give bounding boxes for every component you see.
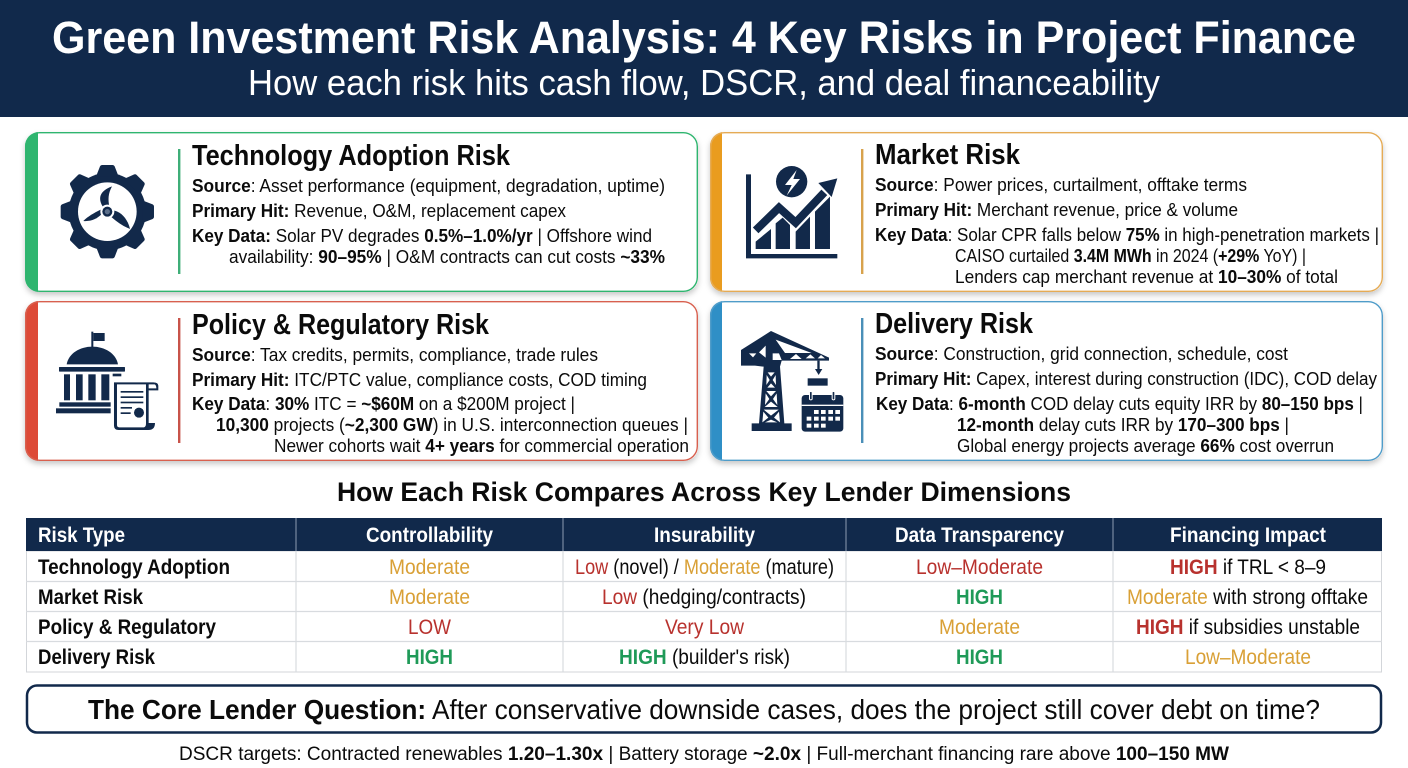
table row: market risk [38, 586, 1368, 609]
table row: technology adoption [38, 556, 1326, 579]
heading: Delivery Risk [875, 308, 1034, 340]
text: key data: 10,300 projects (~2,300 GW) in U.S. interconnection queues | [216, 414, 688, 435]
table row: policy and regulatory: HIGH if subsidies unstable [1136, 616, 1360, 639]
text: primary hit: Primary Hit: Revenue, O&M, replacement capex [192, 200, 567, 221]
footnote: DSCR targets: DSCR targets: Contracted renewables 1.20–1.30x | Battery storage ~2.0x | Full-merchant financing rare above 100–150 MW [179, 744, 1229, 765]
subtitle: How each risk hits cash flow, DSCR, and deal financeability [248, 62, 1160, 103]
table row: policy and regulatory: Policy & Regulatory [38, 616, 216, 639]
text: key data [192, 393, 689, 456]
text: key data: Key Data: Solar CPR falls below 75% in high-penetration markets | [875, 224, 1379, 245]
text: primary hit: Primary Hit: Merchant revenue, price & volume [875, 199, 1238, 220]
text: key data: Key Data: 6-month COD delay cuts equity IRR by 80–150 bps | [876, 393, 1363, 414]
panel: market risk [710, 132, 1383, 292]
table header row [38, 524, 1326, 547]
text: source: Source: Power prices, curtailment, offtake terms [875, 174, 1247, 195]
table row: market risk: HIGH [956, 586, 1003, 609]
table row: technology adoption: Moderate [389, 556, 470, 579]
table row: delivery risk: HIGH (builder's risk) [619, 646, 790, 669]
title: Green Investment Risk Analysis: 4 Key Risks in Project Finance [52, 12, 1356, 63]
table header row: Insurability [654, 524, 755, 547]
table header row: Risk Type [38, 524, 125, 547]
heading: Market Risk [875, 139, 1021, 171]
text: key data [875, 224, 1379, 287]
text: key data: Global energy projects average 66% cost overrun [957, 435, 1334, 456]
comparison table [26, 518, 1382, 672]
table row: policy and regulatory: LOW [408, 616, 451, 639]
text: key data: Key Data: 30% ITC = ~$60M on a $200M project | [192, 393, 575, 414]
text: key data: CAISO curtailed 3.4M MWh in 2024 (+29% YoY) | [955, 245, 1306, 266]
table header row: Financing Impact [1170, 524, 1326, 547]
text: source: Source: Construction, grid connection, schedule, cost [875, 343, 1288, 364]
icon: crane with calendar [741, 331, 843, 432]
icon: government building with document [56, 332, 158, 430]
callout: core lender question [27, 686, 1381, 732]
table row: policy and regulatory [38, 616, 1360, 639]
text: source: Source: Asset performance (equipment, degradation, uptime) [192, 175, 665, 196]
table row: delivery risk: Delivery Risk [38, 646, 155, 669]
table row: delivery risk [38, 646, 1311, 669]
table row: market risk: Moderate with strong offtake [1127, 586, 1368, 609]
text: source: Source: Tax credits, permits, compliance, trade rules [192, 344, 598, 365]
icon: gear with turbine [61, 165, 154, 258]
table row: technology adoption: Low–Moderate [916, 556, 1043, 579]
table row: market risk: Low (hedging/contracts) [602, 586, 806, 609]
text: primary hit: Primary Hit: Capex, interest during construction (IDC), COD delay [875, 368, 1378, 389]
table row: technology adoption: Low (novel) / Moderate (mature) [575, 556, 834, 579]
text: key data [876, 393, 1363, 456]
table row: technology adoption: HIGH if TRL < 8–9 [1170, 556, 1326, 579]
heading: Technology Adoption Risk [192, 140, 511, 172]
text: key data: Newer cohorts wait 4+ years for commercial operation [274, 435, 689, 456]
table row: technology adoption: Technology Adoption [38, 556, 230, 579]
table row: policy and regulatory: Moderate [939, 616, 1020, 639]
table header row: Controllability [366, 524, 493, 547]
heading: Policy & Regulatory Risk [192, 309, 490, 341]
table row: delivery risk: HIGH [406, 646, 453, 669]
text: primary hit: Primary Hit: ITC/PTC value, compliance costs, COD timing [192, 369, 647, 390]
panel: policy and regulatory risk [25, 301, 698, 461]
text: key data: 12-month delay cuts IRR by 170–300 bps | [957, 414, 1289, 435]
text: key data: availability: 90–95% | O&M contracts can cut costs ~33% [229, 246, 665, 267]
table header row: Data Transparency [895, 524, 1064, 547]
panel: delivery risk [710, 301, 1383, 461]
table row: market risk: Market Risk [38, 586, 143, 609]
text: key data: Key Data: Solar PV degrades 0.5%–1.0%/yr | Offshore wind [192, 225, 652, 246]
icon: rising chart with bolt [746, 166, 837, 258]
text: key data: Lenders cap merchant revenue at 10–30% of total [955, 266, 1338, 287]
table row: delivery risk: Low–Moderate [1185, 646, 1311, 669]
section heading: comparison: How Each Risk Compares Across Key Lender Dimensions [337, 477, 1071, 507]
table row: market risk: Moderate [389, 586, 470, 609]
callout: core lender question: The Core Lender Question: After conservative downside cases, does the project still cover debt on time? [88, 694, 1320, 725]
table row: policy and regulatory: Very Low [665, 616, 745, 639]
header banner [0, 0, 1408, 117]
text: key data [192, 225, 665, 267]
panel: technology adoption risk [25, 132, 698, 292]
table row: delivery risk: HIGH [956, 646, 1003, 669]
